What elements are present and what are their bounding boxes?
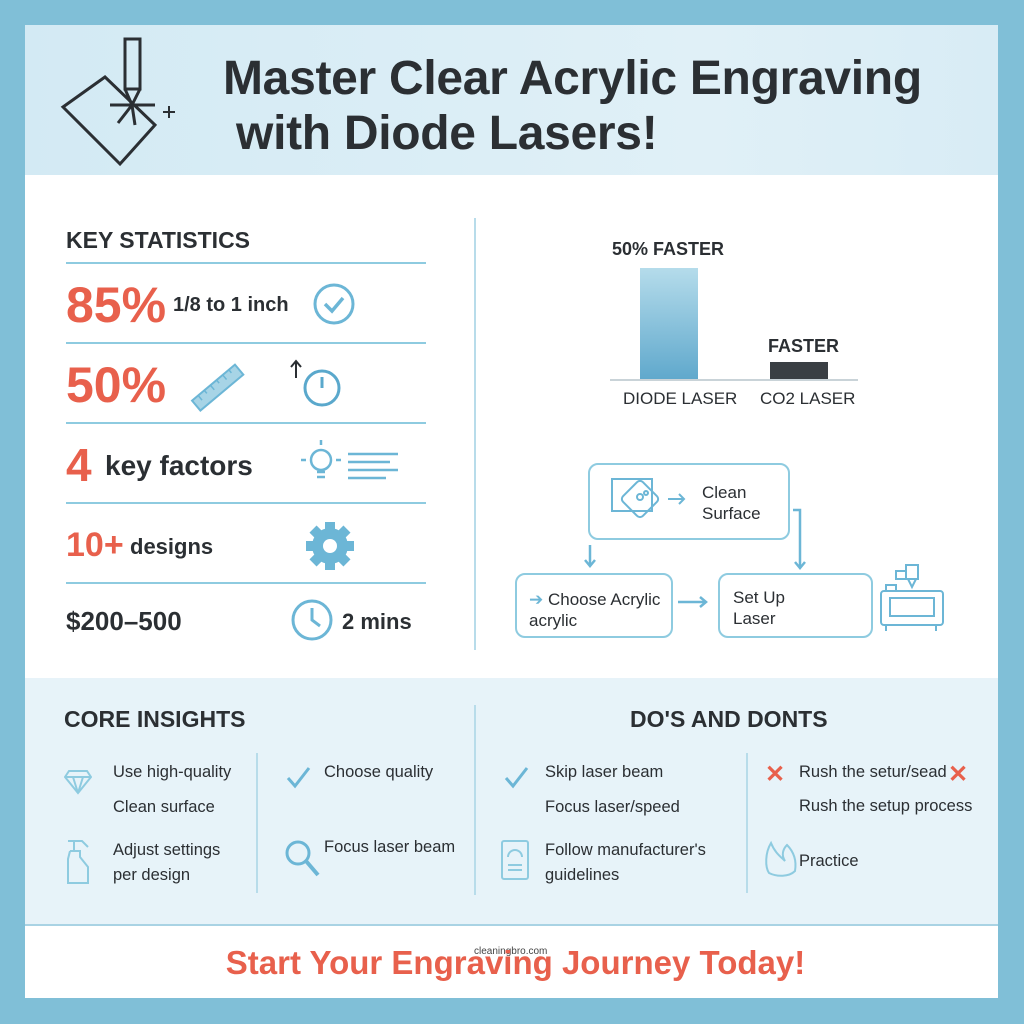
title: with Diode Lasers! bbox=[236, 107, 657, 160]
stat: 10+ designs: 10+ bbox=[66, 526, 124, 564]
stat: 10+ designs: designs bbox=[130, 534, 213, 559]
stat: 85%: 85% bbox=[66, 277, 166, 333]
core insights col 1: Adjust settings bbox=[113, 841, 220, 859]
stat: 85%: 1/8 to 1 inch bbox=[173, 294, 289, 316]
heading: do's and donts: DO'S AND DONTS bbox=[630, 706, 828, 732]
panel: key statistics bbox=[66, 227, 426, 640]
title bbox=[223, 52, 922, 160]
don'ts column: ✕ bbox=[948, 761, 968, 788]
core insights col 1: Clean surface bbox=[113, 798, 215, 816]
do's column: guidelines bbox=[545, 866, 619, 884]
bar chart: 50% FASTER bbox=[612, 239, 724, 259]
bar chart: CO2 LASER bbox=[760, 389, 855, 408]
core insights col 2 bbox=[286, 763, 455, 876]
bar chart bbox=[610, 239, 858, 408]
do's column bbox=[501, 763, 706, 884]
bar chart: FASTER bbox=[768, 336, 839, 356]
step: set up laser bbox=[718, 573, 873, 638]
heading: core insights: CORE INSIGHTS bbox=[64, 706, 245, 732]
stat: 4 key factors bbox=[66, 439, 398, 491]
watermark: cleaningbro.com bbox=[474, 946, 547, 957]
core insights col 1: per design bbox=[113, 866, 190, 884]
stat: 10+ designs bbox=[66, 522, 354, 570]
core insights col 2: Choose quality bbox=[324, 763, 433, 781]
insights band bbox=[25, 678, 998, 925]
icon: laser engraving bbox=[60, 38, 175, 166]
stat: 4 key factors: 4 bbox=[66, 439, 92, 491]
don'ts column bbox=[765, 761, 972, 877]
step: set up laser: Set Up bbox=[733, 588, 785, 607]
title: Master Clear Acrylic Engraving bbox=[223, 52, 922, 105]
footer call to action: Start Your Engraving Journey Today! bbox=[226, 944, 805, 981]
flowchart bbox=[515, 463, 944, 638]
stat: price and time bbox=[66, 600, 412, 640]
header band bbox=[25, 25, 998, 175]
stat: 4 key factors: key factors bbox=[105, 450, 253, 481]
step: clean surface: Clean bbox=[702, 483, 746, 502]
core insights col 2: Focus laser beam bbox=[324, 838, 455, 856]
step: choose acrylic bbox=[515, 573, 673, 638]
icon: laser machine bbox=[880, 564, 944, 631]
step: clean surface bbox=[588, 463, 790, 540]
stat: 85% bbox=[66, 277, 354, 333]
step: choose acrylic: ➔ Choose Acrylic bbox=[529, 590, 660, 609]
core insights col 1: Use high-quality bbox=[113, 763, 231, 781]
do's column: Follow manufacturer's bbox=[545, 841, 706, 859]
step: choose acrylic: acrylic bbox=[529, 611, 577, 630]
bar chart: DIODE LASER bbox=[623, 389, 737, 408]
stat: 50% bbox=[66, 357, 340, 413]
step: clean surface: Surface bbox=[702, 504, 761, 523]
stat: price and time: $200–500 bbox=[66, 606, 182, 636]
don'ts column: Rush the setur/sead bbox=[799, 763, 947, 781]
don'ts column: Rush the setup process bbox=[799, 797, 972, 815]
don'ts column: ✕ bbox=[765, 761, 785, 788]
stat: 50%: 50% bbox=[66, 357, 166, 413]
core insights col 1 bbox=[64, 763, 232, 884]
stat: price and time: 2 mins bbox=[342, 609, 412, 634]
do's column: Focus laser/speed bbox=[545, 798, 680, 816]
arrows bbox=[584, 508, 806, 608]
heading: key statistics: KEY STATISTICS bbox=[66, 227, 250, 253]
footer line bbox=[25, 924, 998, 926]
don'ts column: Practice bbox=[799, 852, 859, 870]
step: set up laser: Laser bbox=[733, 609, 776, 628]
do's column: Skip laser beam bbox=[545, 763, 663, 781]
